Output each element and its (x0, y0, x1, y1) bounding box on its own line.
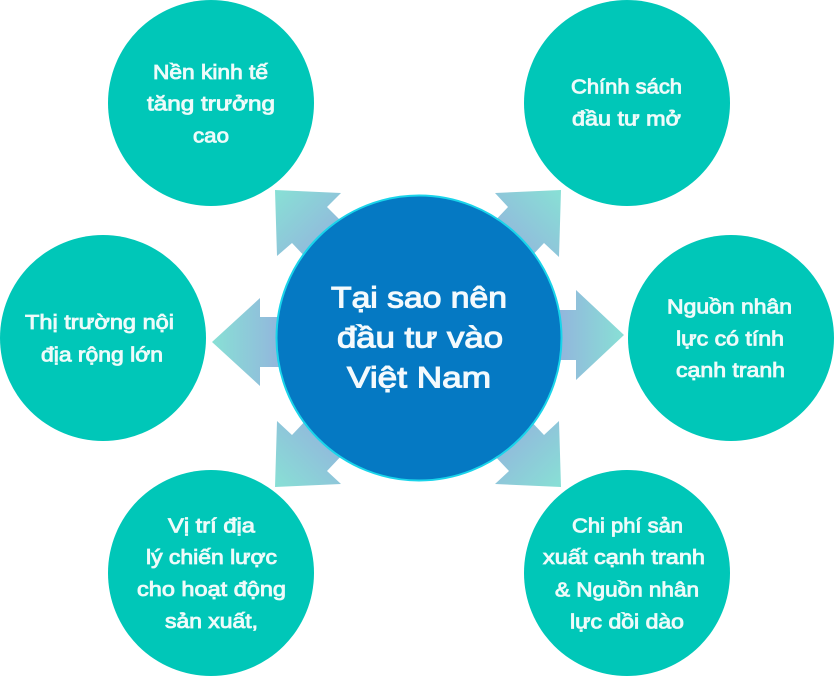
arrow: left (212, 298, 295, 386)
panel: high economic growth: Nền kinh tế (153, 61, 269, 84)
panel: high economic growth (108, 0, 314, 206)
arrow: bottom-left (275, 417, 345, 487)
panel: competitive workforce (628, 235, 834, 441)
panel: strategic location: sản xuất, (165, 610, 258, 633)
panel: large domestic market (0, 235, 206, 441)
panel: open investment policy: đầu tư mở (572, 108, 681, 130)
center circle: main question (276, 196, 562, 480)
panel: competitive workforce: Nguồn nhân (667, 296, 792, 318)
panel: high economic growth: cao (193, 124, 229, 148)
panel: competitive production cost: & Nguồn nhân (555, 578, 699, 602)
center circle: main question: đầu tư vào (337, 322, 503, 354)
panel: strategic location (108, 470, 314, 676)
panel: competitive workforce: lực có tính (676, 328, 784, 350)
panel: large domestic market: địa rộng lớn (41, 344, 163, 366)
panel: strategic location: cho hoạt động (137, 578, 286, 601)
panel: high economic growth: tăng trưởng (147, 92, 275, 116)
panel: large domestic market: Thị trường nội (25, 311, 174, 334)
panel: open investment policy (524, 0, 730, 206)
panel: strategic location: Vị trí địa (168, 514, 256, 538)
panel: competitive production cost (524, 470, 730, 676)
panel: competitive production cost: lực dồi dào (570, 610, 684, 634)
panel: open investment policy: Chính sách (571, 76, 682, 98)
panel: competitive production cost: xuất cạnh tranh (543, 546, 705, 569)
arrow: top-left (275, 190, 345, 261)
arrow: right (540, 290, 624, 380)
arrow: top-right (491, 190, 561, 261)
panel: strategic location: lý chiến lược (146, 546, 277, 569)
arrow: bottom-right (491, 417, 561, 487)
center circle: main question: Việt Nam (347, 362, 491, 394)
panel: competitive production cost: Chi phí sản (572, 514, 683, 538)
center circle: main question: Tại sao nên (331, 282, 507, 314)
panel: competitive workforce: cạnh tranh (676, 359, 785, 382)
